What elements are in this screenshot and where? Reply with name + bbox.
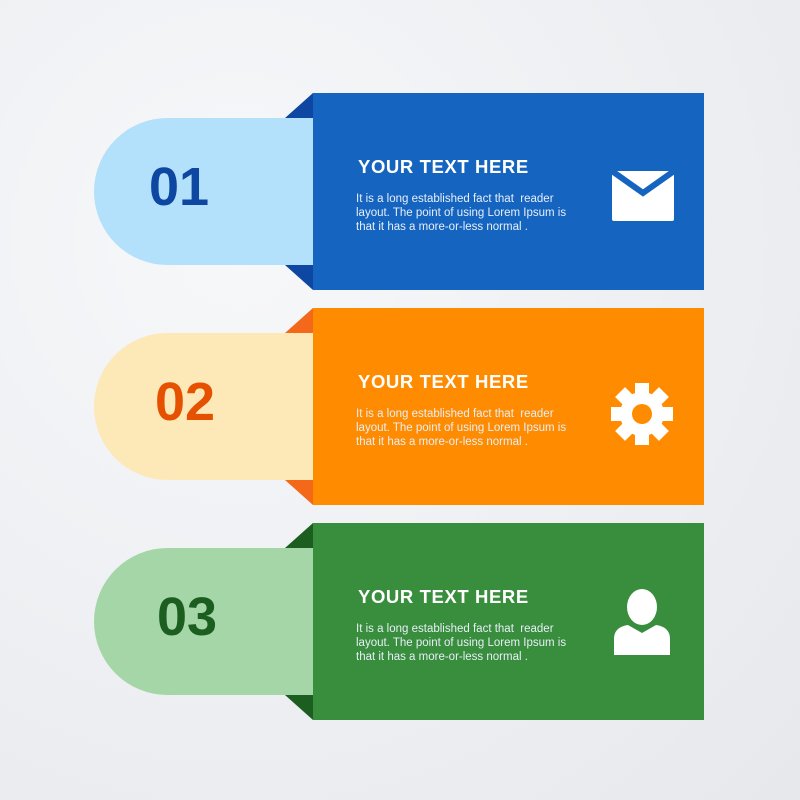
panel 1: [313, 93, 704, 290]
icon: gear: [611, 383, 673, 445]
body text: [356, 623, 566, 663]
number 02: 02: [155, 372, 215, 432]
row 2: [94, 308, 704, 505]
body text: It is a long established fact that reader: [356, 408, 554, 420]
heading: YOUR TEXT HERE: [358, 371, 529, 392]
pill: 01: [94, 118, 324, 265]
number 03: 03: [157, 587, 217, 647]
body text: that it has a more-or-less normal .: [356, 436, 528, 448]
body text: layout. The point of using Lorem Ipsum is: [356, 207, 566, 219]
panel 2: [313, 308, 704, 505]
folds: [285, 308, 313, 505]
folds: [285, 523, 313, 720]
pill: 02: [94, 333, 324, 480]
body text: It is a long established fact that reader: [356, 623, 554, 635]
body text: [356, 408, 566, 448]
heading: YOUR TEXT HERE: [358, 586, 529, 607]
body text: layout. The point of using Lorem Ipsum is: [356, 422, 566, 434]
folds: [285, 93, 313, 290]
icon: envelope: [612, 171, 674, 221]
number 01: 01: [149, 157, 209, 217]
body text: [356, 193, 566, 233]
row 1: [94, 93, 704, 290]
icon: user: [614, 589, 670, 655]
body text: that it has a more-or-less normal .: [356, 651, 528, 663]
body text: layout. The point of using Lorem Ipsum is: [356, 637, 566, 649]
pill: 03: [94, 548, 324, 695]
row 3: [94, 523, 704, 720]
body text: It is a long established fact that reader: [356, 193, 554, 205]
body text: that it has a more-or-less normal .: [356, 221, 528, 233]
heading: YOUR TEXT HERE: [358, 156, 529, 177]
panel 3: [313, 523, 704, 720]
